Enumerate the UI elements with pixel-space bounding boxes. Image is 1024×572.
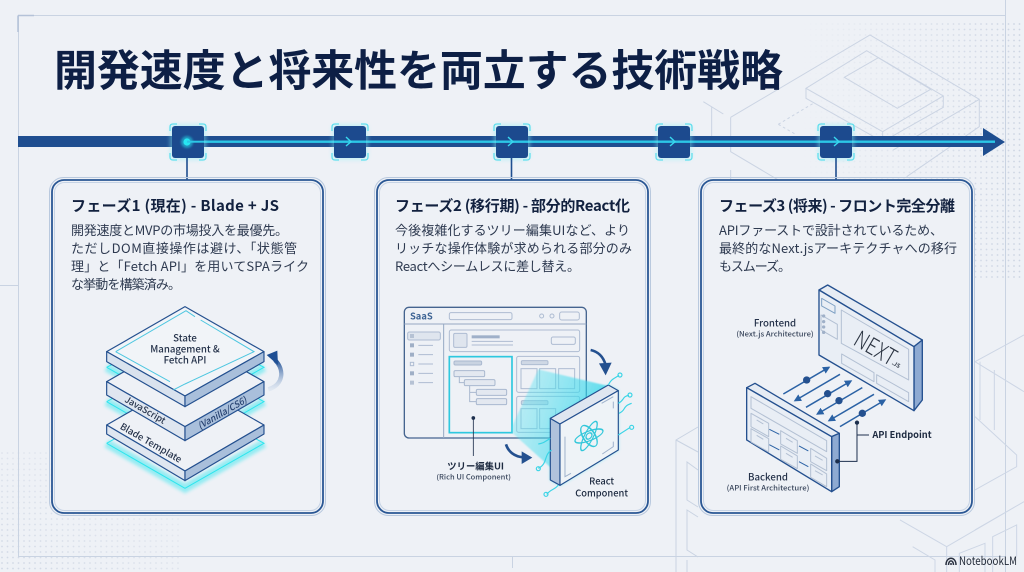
text: phase 2 description: 今後複雑化するツリー編集UIなど、より	[395, 220, 630, 239]
text: phase 1 description	[71, 220, 309, 293]
illustration: SaaS window with React component	[404, 307, 634, 499]
text: phase 3 description: もスムーズ。	[719, 256, 791, 275]
label: react component: React	[589, 473, 614, 487]
text: phase 1 description: ただしDOM直接操作は避け、「状態管	[71, 238, 297, 257]
label: Frontend: Frontend	[754, 315, 796, 329]
label: Next.js Architecture: (Next.js Architecture)	[736, 329, 814, 340]
bottom plate	[107, 380, 264, 481]
illustration: layered stack	[107, 307, 281, 488]
panel: phase 3	[698, 178, 974, 516]
label: fetch api: Fetch API	[164, 352, 206, 366]
text: phase 3 description: 最終的なNext.jsアーキテクチャへの移行	[719, 238, 957, 257]
glow layers	[107, 353, 264, 488]
label: Next.js logo: NEXT	[848, 322, 904, 373]
node: transition 2	[656, 124, 692, 160]
panel: phase 2	[374, 178, 650, 516]
arrow: lower curved	[506, 444, 532, 464]
panel: phase 1	[50, 178, 326, 516]
node: transition 1	[332, 124, 368, 160]
logo: NotebookLM	[946, 553, 1017, 569]
text: phase 1 description: 開発速度とMVPの市場投入を最優先。	[71, 220, 288, 239]
text: phase 2 description: Reactへシームレスに差し替え。	[395, 256, 580, 275]
title: 開発速度と将来性を両立する技術戦略	[54, 37, 783, 99]
api nodes	[803, 376, 866, 417]
circuit traces	[536, 373, 634, 496]
label: javascript: JavaScript	[122, 393, 169, 427]
icon: notebook	[946, 558, 956, 565]
icon: curved arrow	[267, 351, 281, 389]
timeline bar	[18, 136, 986, 147]
label: management: Management &	[150, 341, 220, 355]
icon: react atom	[575, 416, 603, 456]
middle plate	[107, 337, 264, 441]
label: component: Component	[575, 485, 628, 499]
label: blade template: Blade Template	[118, 419, 185, 466]
api arrows	[783, 367, 885, 427]
node: phase 2	[494, 124, 530, 160]
highlighted tree editor area	[449, 357, 512, 433]
text: phase 3 description	[719, 220, 957, 275]
backend panel	[747, 383, 839, 492]
leader line	[471, 416, 475, 456]
label: tree editor: ツリー編集UI	[447, 458, 504, 472]
text: phase 2 description	[395, 220, 632, 275]
heading: phase 2: フェーズ2 (移行期) - 部分的React化	[395, 195, 630, 216]
label: API Endpoint: API Endpoint	[871, 427, 932, 441]
arrow: top curved	[591, 350, 612, 375]
label: rich ui component: (Rich UI Component)	[436, 473, 511, 483]
label: state management: State	[173, 331, 197, 345]
label: API First Architecture: (API First Architecture)	[727, 483, 809, 494]
label: vanilla css: (Vanilla/CS6)	[195, 393, 250, 432]
illustration: frontend and backend separation	[727, 285, 932, 494]
node connectors	[187, 158, 836, 180]
top plate	[107, 307, 264, 407]
saas window: SaaS	[410, 308, 433, 322]
heading: phase 1: フェーズ1 (現在) - Blade + JS	[71, 195, 279, 216]
timeline	[18, 124, 1005, 180]
label: Backend: Backend	[748, 469, 788, 483]
connector: API endpoint	[836, 421, 869, 463]
text: phase 2 description: リッチな操作体験が求められる部分のみ	[395, 238, 632, 257]
timeline cyan line	[187, 140, 995, 143]
top plate circuit outline	[116, 311, 254, 390]
timeline arrowhead	[983, 128, 1005, 156]
react component block	[550, 385, 618, 485]
node: phase 3	[818, 124, 854, 160]
frontend panel	[819, 285, 922, 411]
text: phase 3 description: APIファーストで設計されているため、	[719, 220, 943, 239]
saas window	[404, 307, 586, 438]
node: phase 1	[170, 124, 206, 160]
text: phase 1 description: 理」と「Fetch API」を用いてSPAライク	[71, 256, 309, 275]
text: phase 1 description: な挙動を構築済み。	[71, 274, 181, 293]
heading: phase 3: フェーズ3 (将来) - フロント完全分離	[719, 195, 955, 216]
projection beam	[512, 369, 608, 468]
label: .js: .JS	[890, 358, 903, 370]
